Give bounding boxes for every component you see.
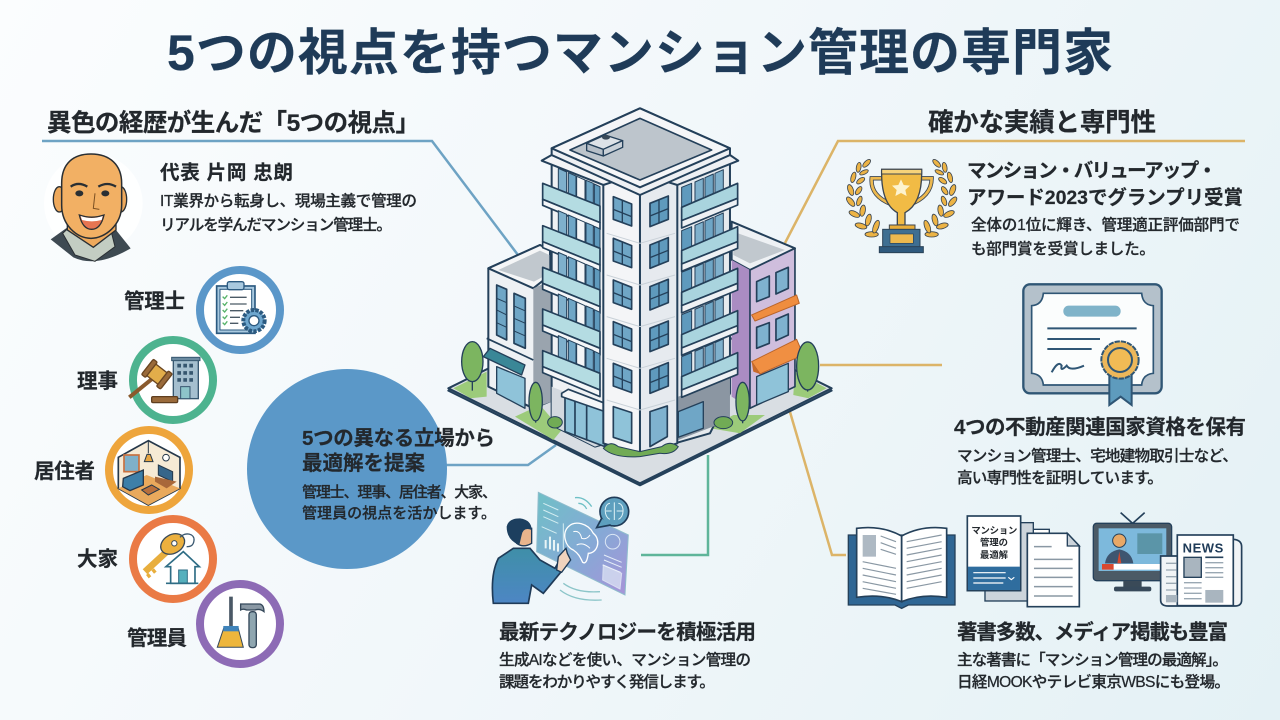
text: callout body: 管理士、理事、居住者、大家、 <box>302 483 497 501</box>
icon: open book <box>848 528 955 608</box>
connector: technology line <box>641 455 708 555</box>
text: award body: 全体の1位に輝き、管理適正評価部門で <box>971 216 1240 234</box>
icon: book cover and documents <box>967 516 1079 607</box>
item: kanriin <box>127 584 280 664</box>
item: oya: 大家 <box>77 548 118 571</box>
text: qualifications body: 高い専門性を証明しています。 <box>957 469 1163 487</box>
item: kanriin: 管理員 <box>127 627 187 650</box>
text: award heading: マンション・バリューアップ・ <box>967 160 1217 182</box>
text: representative description: リアルを学んだマンション管理士。 <box>160 216 392 234</box>
icon: trophy with laurels <box>845 158 958 253</box>
connector: profile line <box>42 141 518 255</box>
text: publications heading: 著書多数、メディア掲載も豊富 <box>957 620 1228 644</box>
text: award body: も部門賞を受賞しました。 <box>971 239 1155 258</box>
heading: left: 異色の経歴が生んだ「5つの視点」 <box>47 108 420 137</box>
text: publications body: 日経MOOKやテレビ東京WBSにも登場。 <box>957 673 1230 691</box>
item: kyojusha: 居住者 <box>34 460 95 483</box>
icon: portrait <box>44 154 143 261</box>
icon: book cover and documents: 管理の <box>980 536 1008 547</box>
text: technology body: 生成AIなどを使い、マンション管理の <box>499 651 751 669</box>
text: callout body: 管理員の視点を活かします。 <box>302 504 496 522</box>
icon: book cover and documents: 最適解 <box>980 549 1009 560</box>
text: publications body <box>957 651 1230 691</box>
icon: newspaper <box>1161 535 1242 606</box>
text: callout heading: 5つの異なる立場から <box>302 427 495 450</box>
item: riji: 理事 <box>77 370 118 393</box>
text: award heading: アワード2023でグランプリ受賞 <box>967 186 1243 209</box>
icon: newspaper: NEWS <box>1183 541 1224 556</box>
illustration: apartment building <box>448 108 832 485</box>
text: technology heading: 最新テクノロジーを積極活用 <box>499 621 756 644</box>
connector: certificate line <box>820 364 942 366</box>
panel: publications and media <box>848 513 1242 691</box>
item: oya <box>77 519 213 599</box>
icon: book cover and documents: マンション <box>971 525 1017 535</box>
panel: main circle callout <box>247 369 497 569</box>
text: callout heading <box>302 427 495 475</box>
panel: award <box>845 158 1243 258</box>
panel: profile <box>44 154 417 261</box>
item: kyojusha <box>34 430 189 510</box>
item: kanrishi <box>124 270 280 350</box>
icon: television <box>1093 513 1172 591</box>
heading: right: 確かな実績と専門性 <box>928 109 1156 137</box>
text: qualifications body: マンション管理士、宅地建物取引士など、 <box>957 447 1238 465</box>
text: representative description <box>160 192 417 234</box>
item: kanrishi: 管理士 <box>124 290 185 313</box>
connector: books line <box>790 412 846 555</box>
connector: achievements line <box>785 141 1245 243</box>
text: award body <box>971 216 1240 258</box>
icon: certificate <box>1023 284 1162 405</box>
text: publications body: 主な著書に「マンション管理の最適解」。 <box>957 651 1228 669</box>
text: representative description: IT業界から転身し、現場主義で管理の <box>160 192 417 210</box>
text: representative name: 代表 片岡 忠朗 <box>160 161 293 184</box>
panel: qualifications <box>954 284 1246 487</box>
title: 5つの視点を持つマンション管理の専門家 <box>167 25 1113 81</box>
text: callout body <box>302 483 497 522</box>
text: technology body: 課題をわかりやすく発信します。 <box>499 673 715 691</box>
text: callout heading: 最適解を提案 <box>302 452 426 475</box>
text: award heading <box>967 160 1243 209</box>
text: qualifications body <box>957 447 1238 487</box>
panel: five perspectives <box>34 270 280 664</box>
connector: perspectives line <box>440 445 556 465</box>
icon: person with AI screen <box>492 492 629 603</box>
text: qualifications heading: 4つの不動産関連国家資格を保有 <box>954 415 1246 439</box>
panel: technology <box>492 492 756 691</box>
text: technology body <box>499 651 751 691</box>
item: riji <box>77 340 213 420</box>
